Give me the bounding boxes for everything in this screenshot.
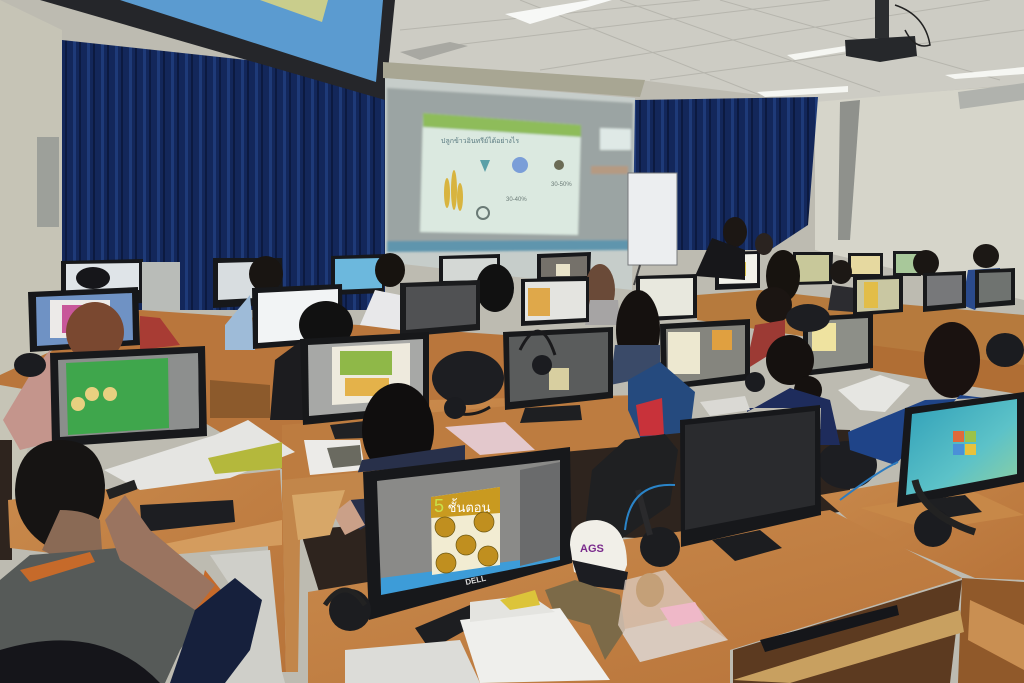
middle row people xyxy=(3,287,792,450)
Dell logo: DELL xyxy=(465,574,487,587)
monitor 3 xyxy=(61,259,180,310)
papers on front desk xyxy=(345,590,610,683)
monitor 13 xyxy=(503,327,613,423)
monitor 6 xyxy=(331,254,384,295)
projected title: ปลูกข้าวอินทรีย์ได้อย่างไร xyxy=(441,136,519,145)
icon: Windows logo xyxy=(953,431,976,455)
front desk xyxy=(308,510,964,683)
flip chart xyxy=(628,173,677,285)
center desk xyxy=(282,395,640,670)
headsets xyxy=(445,331,555,414)
red backpack xyxy=(628,362,695,437)
floor xyxy=(210,550,285,683)
back desks xyxy=(0,290,1024,480)
icon: wheat xyxy=(444,170,463,211)
projected percentages: 30-40% xyxy=(506,197,527,203)
projection screen xyxy=(383,62,645,290)
black off monitor xyxy=(680,405,821,561)
cap xyxy=(570,520,628,590)
monitor 11 xyxy=(521,277,589,326)
chairs xyxy=(432,304,877,489)
right curtain xyxy=(632,97,818,250)
monitor 14 xyxy=(660,319,750,390)
monitor 18 xyxy=(853,275,903,316)
monitor stand base xyxy=(415,605,475,650)
monitor 12 xyxy=(636,274,697,322)
monitor 2 xyxy=(28,287,140,352)
monitor 16 xyxy=(715,251,760,290)
right desk xyxy=(820,460,1024,683)
ceiling xyxy=(380,0,1024,109)
monitor row two xyxy=(28,268,1015,352)
left curtain xyxy=(62,40,385,310)
monitor 7: design screen xyxy=(300,332,429,439)
snack in plastic bag xyxy=(618,570,728,662)
monitor 20 xyxy=(975,268,1015,308)
projector xyxy=(845,0,930,62)
foreground man xyxy=(0,440,262,683)
projected software window xyxy=(387,88,633,252)
monitor 21b xyxy=(893,251,921,276)
right seated women xyxy=(747,322,985,465)
papers on desk xyxy=(304,375,910,475)
projected infographic icons xyxy=(477,157,564,219)
poster: five steps xyxy=(431,487,500,575)
monitor 10 xyxy=(537,252,591,279)
front Illustrator monitor xyxy=(363,447,572,620)
monitor 15 xyxy=(803,313,873,376)
cap logo: AGS xyxy=(580,543,604,555)
headset on desk xyxy=(625,485,680,567)
far monitor row xyxy=(61,251,921,310)
monitor 17 xyxy=(793,252,833,285)
brown bag xyxy=(545,580,625,660)
monitor 8 xyxy=(400,280,480,337)
left desk xyxy=(8,420,295,672)
monitor 9 xyxy=(439,254,500,284)
empty chair xyxy=(585,434,678,540)
monitor 4 xyxy=(213,258,283,308)
poster title: 5 ชั้นตอน xyxy=(434,496,491,516)
center woman xyxy=(325,383,465,535)
monitor 5 xyxy=(252,284,343,349)
monitor 19 xyxy=(923,271,966,312)
projected percentages: 30-50% xyxy=(551,182,572,188)
monitor row three xyxy=(50,313,873,447)
wall-mounted TV xyxy=(40,0,395,100)
right headset xyxy=(914,480,975,547)
monitor 1: green game screen xyxy=(50,346,207,447)
Windows desktop monitor xyxy=(897,392,1024,518)
center desk side and drawer xyxy=(282,455,570,672)
monitor 21 xyxy=(848,253,883,277)
back row people xyxy=(76,217,1000,350)
front-left headset xyxy=(325,589,371,631)
headset earcups xyxy=(14,333,1024,419)
under-desk shadows xyxy=(0,425,850,595)
blue cable xyxy=(840,462,898,500)
projected percentages xyxy=(506,182,572,203)
